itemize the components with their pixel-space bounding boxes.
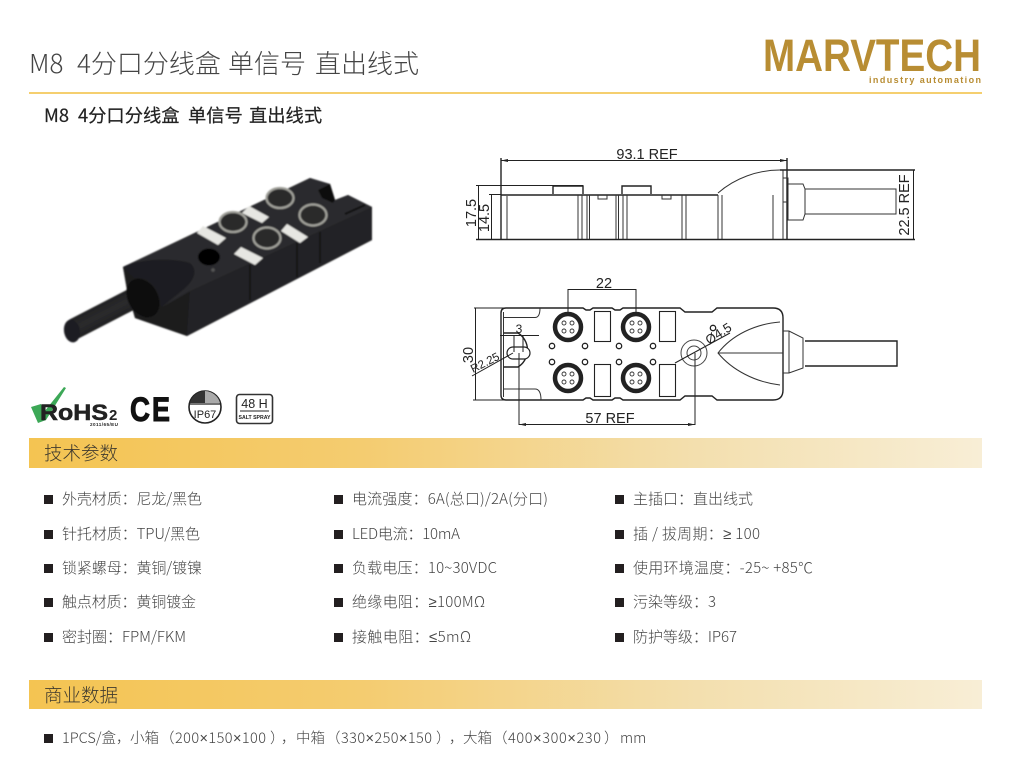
panel: commercial data heading bbox=[29, 680, 982, 709]
packaging information: ， bbox=[281, 727, 296, 748]
packaging information: 330×250×150 bbox=[341, 727, 432, 748]
packaging information: （ bbox=[326, 727, 340, 748]
segment lines bbox=[250, 232, 320, 300]
packaging information: 200×150×100 bbox=[175, 727, 266, 748]
packaging information: 1PCS/盒， bbox=[62, 727, 130, 748]
spec column 3: 使用环境温度：-25~ +85℃ bbox=[633, 557, 813, 578]
mounting hole bbox=[681, 340, 707, 366]
dimension 93.1 REF bbox=[501, 147, 787, 163]
indicator holes bbox=[549, 325, 716, 365]
dimension 57 REF: 57 REF bbox=[585, 411, 635, 427]
packaging information bbox=[44, 727, 646, 748]
mounting notch bbox=[504, 308, 541, 400]
connector and cable bbox=[783, 331, 897, 373]
title: 单信号 bbox=[228, 44, 306, 81]
side view drawing bbox=[464, 147, 915, 240]
certification: IP67: IP67 bbox=[194, 409, 216, 421]
title: 直出线式 bbox=[315, 44, 419, 81]
title: M8 bbox=[29, 44, 63, 81]
dimension 30 bbox=[461, 308, 510, 400]
dimension R2.25: R2.25 bbox=[469, 351, 502, 376]
subtitle: 直出线式 bbox=[249, 102, 322, 128]
end dome bbox=[123, 260, 194, 307]
certification: IP67 bbox=[189, 391, 221, 423]
spec column 1: 密封圈：FPM/FKM bbox=[62, 626, 186, 647]
spec column 1: 外壳材质：尼龙/黑色 bbox=[62, 488, 202, 509]
dimension diameter 4.5 bbox=[675, 320, 734, 363]
certification: CE bbox=[130, 391, 170, 429]
body bbox=[123, 178, 372, 336]
label windows bbox=[197, 206, 308, 265]
packaging information: 大箱 bbox=[463, 727, 492, 748]
mounting slot bbox=[504, 333, 530, 367]
spec column 1 bbox=[44, 488, 202, 647]
spec column 3: 主插口：直出线式 bbox=[633, 488, 753, 509]
spec column 3: 污染等级：3 bbox=[633, 591, 716, 612]
mounting hole bbox=[198, 248, 220, 266]
cable collar bbox=[120, 272, 166, 324]
dimension 22: 22 bbox=[596, 276, 612, 292]
logo: MARVTECH bbox=[763, 30, 981, 81]
certification: RoHS: RoHS bbox=[40, 400, 108, 425]
certification: CE: C bbox=[130, 391, 150, 429]
spec column 1: 触点材质：黄铜镀金 bbox=[62, 591, 196, 612]
dimension 17.5: 17.5 bbox=[464, 199, 480, 227]
dimension 14.5: 14.5 bbox=[477, 204, 493, 232]
dimension 93.1 REF: 93.1 REF bbox=[616, 147, 678, 163]
packaging information: （ bbox=[493, 727, 508, 748]
dimension 14.5 bbox=[477, 194, 501, 239]
top face bbox=[123, 178, 372, 307]
top view drawing bbox=[461, 276, 897, 427]
panel: technical parameters heading bbox=[29, 438, 982, 468]
body outline bbox=[476, 158, 915, 240]
certification: RoHS: 2 bbox=[109, 407, 117, 424]
dimension 30: 30 bbox=[461, 347, 477, 363]
packaging information: 400×300×230 bbox=[508, 727, 601, 748]
dimension diameter 4.5: Ø4.5 bbox=[702, 320, 734, 348]
certification: CE: E bbox=[152, 391, 170, 429]
spec column 2 bbox=[334, 488, 548, 647]
packaging information: ） bbox=[270, 727, 284, 748]
title: 4分口分线盒 bbox=[77, 44, 221, 81]
spec column 2: 电流强度：6A(总口)/2A(分口) bbox=[352, 488, 548, 509]
spec column 1: 锁紧螺母：黄铜/镀镍 bbox=[62, 557, 202, 578]
packaging information: 小箱 bbox=[130, 727, 159, 748]
cable bbox=[62, 297, 136, 344]
product photo bbox=[62, 178, 372, 344]
spec column 2: 接触电阻：≤5mΩ bbox=[352, 626, 471, 647]
certification: RoHS: 2011/65/EU bbox=[90, 422, 119, 427]
packaging information: （ bbox=[160, 727, 174, 748]
packaging information: mm bbox=[620, 727, 646, 748]
subtitle: M8 bbox=[44, 102, 69, 128]
certification: salt spray bbox=[236, 394, 272, 424]
spec column 2: LED电流：10mA bbox=[352, 523, 460, 544]
certification: salt spray: SALT SPRAY bbox=[238, 415, 271, 421]
spec column 1: 针托材质：TPU/黑色 bbox=[62, 523, 200, 544]
logo: industry automation bbox=[869, 75, 981, 85]
packaging information: 中箱 bbox=[296, 727, 325, 748]
end dome bbox=[718, 322, 783, 385]
panel: technical parameters heading: 技术参数 bbox=[44, 440, 118, 466]
dimension 17.5 bbox=[464, 186, 583, 239]
dimension 3: 3 bbox=[516, 322, 523, 336]
panel: commercial data heading: 商业数据 bbox=[44, 682, 118, 708]
dimension 57 REF bbox=[519, 353, 695, 427]
certification: salt spray: 48 H bbox=[241, 397, 268, 411]
spec column 3: 插 / 拔周期：≥ 100 bbox=[633, 523, 760, 544]
dimension 3 bbox=[500, 322, 539, 352]
end face bbox=[123, 267, 187, 336]
mounting notch bbox=[318, 184, 335, 203]
M8 ports bbox=[555, 314, 649, 391]
spec column 3: 防护等级：IP67 bbox=[633, 626, 737, 647]
packaging information: ） bbox=[604, 727, 618, 748]
certification: RoHS bbox=[31, 387, 119, 427]
subtitle: 单信号 bbox=[188, 102, 243, 128]
spec column 2: 负载电压：10~30VDC bbox=[352, 557, 497, 578]
body outline bbox=[501, 308, 783, 400]
subtitle: 4分口分线盒 bbox=[78, 102, 180, 128]
packaging information: ， bbox=[449, 727, 464, 748]
M8 ports bbox=[220, 188, 326, 248]
dimension 22 bbox=[568, 276, 636, 315]
header divider bbox=[29, 92, 982, 94]
label windows bbox=[594, 312, 676, 396]
front face bbox=[187, 207, 372, 336]
dimension 22.5 REF: 22.5 REF bbox=[897, 174, 913, 236]
spec column 3 bbox=[615, 488, 813, 647]
packaging information: ） bbox=[436, 727, 450, 748]
spec column 2: 绝缘电阻：≥100MΩ bbox=[352, 591, 485, 612]
